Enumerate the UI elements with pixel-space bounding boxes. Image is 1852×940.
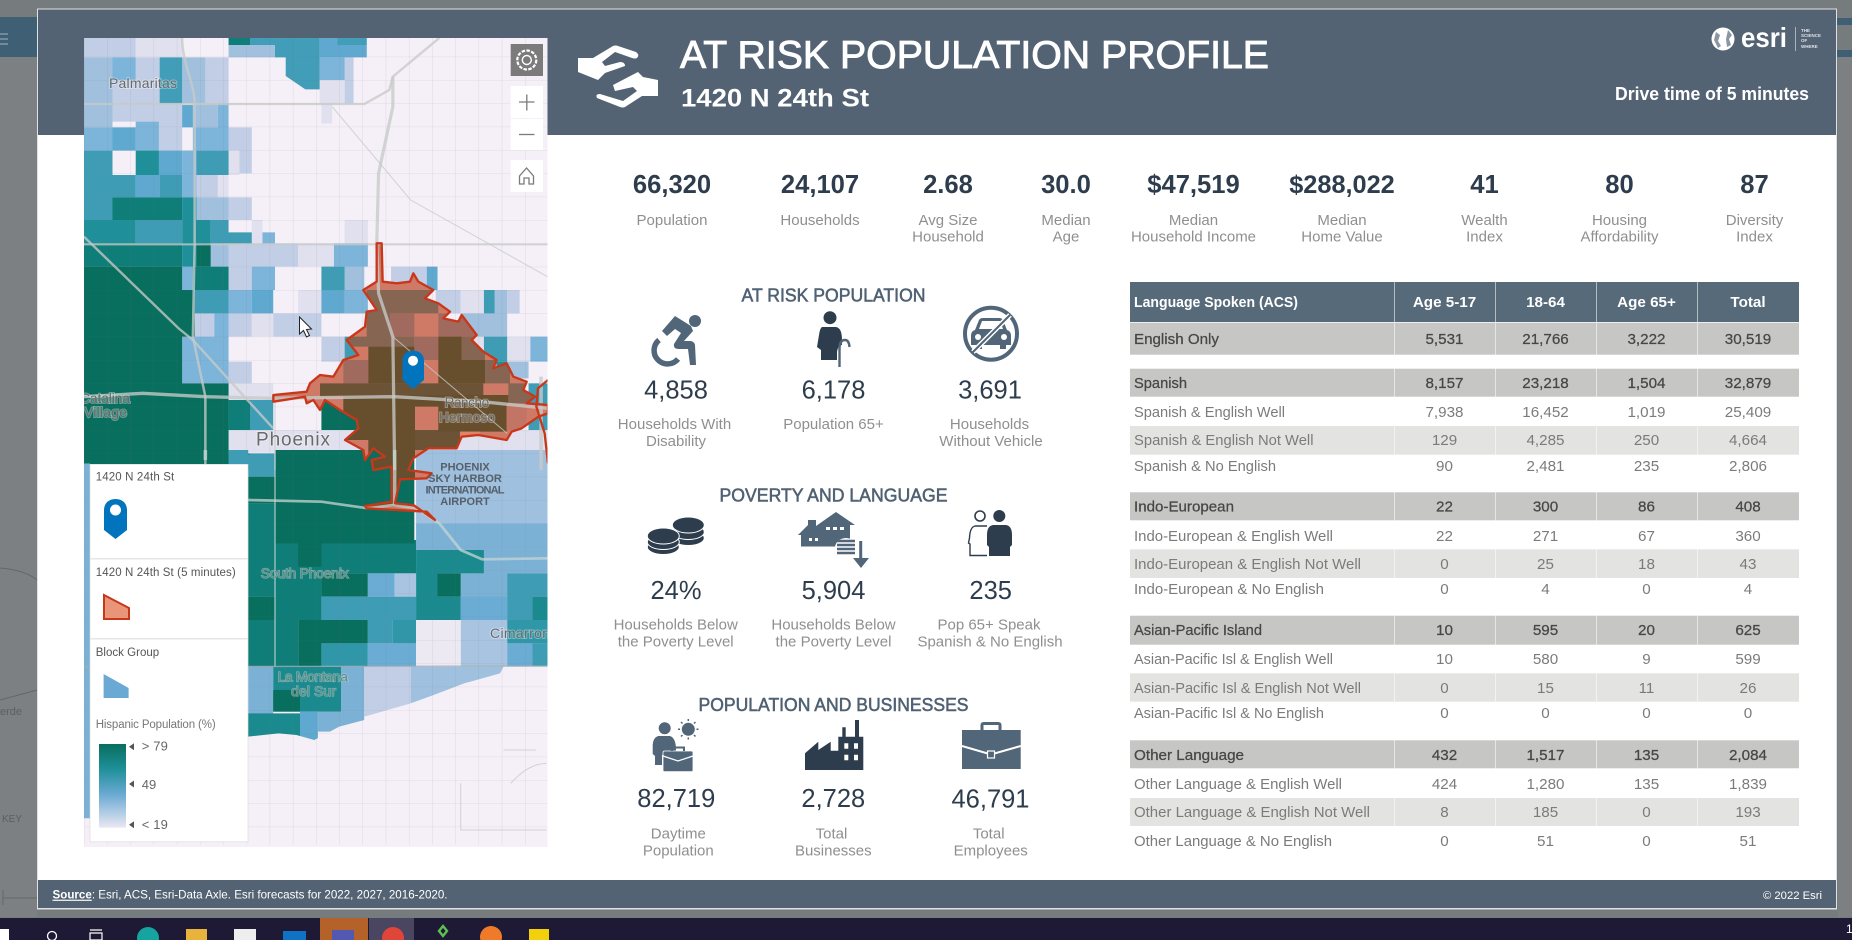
- stat: disability: Disability: [646, 433, 707, 450]
- row: Spanish: 32,879: [1725, 375, 1771, 392]
- row: Indo-European and English Well: 67: [1638, 528, 1655, 545]
- stat: daytime population: 82,719: [637, 785, 715, 813]
- row: Indo-European and No English: Indo-European & No English: [1134, 582, 1324, 598]
- stat: pct below poverty: the Poverty Level: [618, 633, 734, 650]
- place labels: La Montana: [278, 669, 348, 685]
- table header row: [1130, 282, 1799, 322]
- esri logo: WHERE: [1801, 44, 1818, 49]
- row: Indo-European and No English: 4: [1744, 581, 1752, 598]
- row: Spanish: Spanish: [1134, 376, 1187, 392]
- row: Asian-Pacific Island: [1134, 622, 1761, 639]
- stat: disability: [618, 376, 731, 450]
- icon: daytime population: [653, 719, 698, 772]
- row: English Only: 3,222: [1627, 331, 1666, 348]
- drive-time outline: [273, 243, 548, 520]
- stat: population 65+: 6,178: [802, 376, 865, 404]
- row: Other Language and No English: 51: [1537, 833, 1554, 850]
- stat: no vehicle: Without Vehicle: [939, 433, 1043, 450]
- stat: no vehicle: Households: [950, 416, 1029, 433]
- stat: pct below poverty: Households Below: [614, 616, 738, 633]
- stat: total employees: Total: [973, 825, 1005, 842]
- row: Spanish and No English: 235: [1634, 458, 1659, 475]
- legend: pin symbol: [104, 499, 127, 539]
- icon: coins: [647, 517, 704, 554]
- panel: key statistics: 24,107: [781, 171, 859, 199]
- panel: key statistics: Age: [1053, 228, 1079, 246]
- row: Spanish and English Well: 25,409: [1725, 404, 1771, 421]
- row: English Only: 30,519: [1725, 331, 1771, 348]
- row: Other Language: 135: [1634, 747, 1659, 764]
- row: English Only: 21,766: [1522, 331, 1569, 348]
- table header row: Age 65+: [1617, 294, 1676, 311]
- legend: colour ramp: [99, 739, 168, 832]
- row: Indo-European and English Well: 271: [1533, 528, 1558, 545]
- row: Asian-Pacific Island: 595: [1533, 622, 1558, 639]
- row: Other Language and English Well: 424: [1432, 776, 1457, 793]
- row: Asian-Pacific Island: 625: [1735, 622, 1761, 639]
- panel: at risk population: [618, 284, 1043, 450]
- place labels: Hermoso: [439, 410, 495, 425]
- icon: location pin: [402, 351, 424, 389]
- row: Indo-European and No English: 4: [1541, 581, 1550, 598]
- row: Other Language and No English: 0: [1440, 833, 1449, 850]
- icon: house with falling coins: [798, 512, 869, 568]
- panel: key statistics: Diversity: [1726, 212, 1784, 229]
- column dividers: [1394, 282, 1698, 855]
- place labels: INTERNATIONAL: [426, 485, 505, 497]
- row: Indo-European and English Not Well: [1134, 556, 1756, 573]
- stat: population 65+: Population 65+: [783, 416, 884, 433]
- row: English Only: English Only: [1134, 332, 1220, 348]
- row: Other Language: [1134, 747, 1767, 764]
- row: Other Language: 432: [1432, 747, 1457, 764]
- stat: total businesses: Businesses: [795, 842, 872, 859]
- row: Other Language and English Well: 1,839: [1729, 776, 1767, 793]
- panel: key statistics: 87: [1740, 171, 1769, 199]
- panel: key statistics: Median: [1317, 212, 1367, 229]
- stat: daytime population: Daytime: [651, 825, 706, 842]
- panel: key statistics: Housing: [1592, 212, 1647, 229]
- row: Asian-Pacific and No English: 0: [1744, 705, 1752, 722]
- legend: 1420 N 24th St: [96, 472, 175, 484]
- panel: key statistics: 2.68: [923, 171, 973, 199]
- row: Asian-Pacific Island: Asian-Pacific Island: [1134, 623, 1262, 639]
- row: Asian-Pacific and No English: 0: [1642, 705, 1651, 722]
- row: Indo-European and English Not Well: 0: [1440, 556, 1449, 573]
- row: Indo-European and English Not Well: 18: [1638, 556, 1655, 573]
- row: Other Language and English Well: Other Language & English Well: [1134, 777, 1342, 793]
- header bar: [38, 10, 1836, 135]
- row: Other Language: 1,517: [1526, 747, 1565, 764]
- panel: key statistics: 80: [1605, 171, 1634, 199]
- footer bar: [38, 880, 1836, 908]
- row: Spanish and No English: Spanish & No English: [1134, 459, 1276, 475]
- row: Indo-European and English Well: [1134, 528, 1761, 545]
- legend: Hispanic Population (%): [96, 719, 216, 731]
- panel: key statistics: [633, 171, 1784, 246]
- map widgets: [511, 44, 543, 192]
- stat: households below poverty: Households Below: [771, 616, 896, 633]
- legend: [90, 464, 248, 842]
- row: Spanish and English Not Well: 250: [1634, 432, 1659, 449]
- icon: mouse cursor: [300, 317, 312, 337]
- row: Indo-European and English Not Well: 25: [1537, 556, 1554, 573]
- row: Spanish: [1134, 375, 1771, 392]
- panel: key statistics: Wealth: [1461, 212, 1508, 229]
- row: Asian-Pacific and No English: [1134, 705, 1752, 722]
- stat: disability: Households With: [618, 416, 731, 433]
- row: Spanish and English Not Well: Spanish & English Not Well: [1134, 433, 1314, 449]
- table header row: Age 5-17: [1413, 294, 1476, 311]
- icon: helping hands: [578, 46, 658, 108]
- row: Other Language and English Not Well: Other Language & English Not Well: [1134, 805, 1370, 821]
- row: Asian-Pacific and English Well: 9: [1642, 651, 1651, 668]
- row: Other Language and English Not Well: 185: [1533, 804, 1558, 821]
- row: Other Language and No English: [1134, 833, 1756, 850]
- stat: total businesses: [795, 785, 872, 859]
- stat: disability: 4,858: [644, 376, 708, 404]
- panel: key statistics: 66,320: [633, 171, 711, 199]
- row: Indo-European: 408: [1735, 498, 1761, 515]
- row: English Only: 5,531: [1425, 331, 1464, 348]
- copyright: © 2022 Esri: [1763, 890, 1822, 902]
- row: Spanish and No English: 2,481: [1526, 458, 1565, 475]
- heading: AT RISK POPULATION: [742, 284, 926, 306]
- row: Spanish: 23,218: [1522, 375, 1569, 392]
- place labels: PHOENIX: [440, 462, 490, 474]
- row: Indo-European and English Not Well: Indo-European & English Not Well: [1134, 557, 1361, 573]
- row: English Only: [1134, 331, 1771, 348]
- stat: pct below poverty: 24%: [650, 577, 702, 605]
- row: Indo-European and No English: [1134, 581, 1752, 598]
- stat: population 65+: [783, 376, 884, 433]
- legend: Block Group: [96, 647, 159, 659]
- table header row: Total: [1730, 294, 1766, 311]
- row: Spanish and English Not Well: 4,664: [1729, 432, 1767, 449]
- row: Spanish and English Not Well: 4,285: [1526, 432, 1565, 449]
- panel: key statistics: Household: [912, 228, 984, 246]
- panel: population and businesses: [637, 694, 1030, 859]
- stat: spanish and no english: [917, 577, 1063, 650]
- row: Asian-Pacific and English Not Well: 0: [1440, 680, 1449, 697]
- row backgrounds: [1130, 323, 1799, 826]
- row: Indo-European: 300: [1533, 498, 1558, 515]
- stat: pct below poverty: [614, 577, 738, 650]
- row: Other Language: 2,084: [1729, 747, 1767, 764]
- row: Other Language and No English: 51: [1740, 833, 1756, 850]
- stat: households below poverty: 5,904: [802, 577, 865, 605]
- place labels: Phoenix: [256, 430, 330, 450]
- row: Spanish and English Well: Spanish & English Well: [1134, 405, 1285, 421]
- panel: key statistics: Households: [780, 212, 860, 229]
- row: Asian-Pacific and English Not Well: Asian-Pacific Isl & English Not Well: [1134, 681, 1361, 697]
- map grid lines: [84, 38, 547, 845]
- row: Asian-Pacific and English Not Well: [1134, 680, 1756, 697]
- row: Spanish: 8,157: [1425, 375, 1464, 392]
- place labels: Catalina: [80, 390, 130, 406]
- row: Asian-Pacific and English Well: 580: [1533, 651, 1558, 668]
- place labels: SKY HARBOR: [428, 473, 502, 485]
- panel: map: [80, 38, 553, 847]
- legend: colour ramp: 49: [142, 777, 156, 792]
- esri logo: SCIENCE: [1801, 33, 1821, 38]
- icon: briefcase: [962, 724, 1021, 769]
- row: Asian-Pacific and English Well: 599: [1735, 651, 1761, 668]
- stat: total employees: 46,791: [952, 786, 1030, 814]
- esri logo: esri: [1741, 22, 1787, 53]
- legend: colour ramp: > 79: [142, 739, 168, 754]
- stat: total employees: [952, 786, 1030, 859]
- row: Other Language and No English: 0: [1642, 833, 1651, 850]
- subtitle: address: 1420 N 24th St: [681, 84, 870, 112]
- row: Indo-European and English Well: 360: [1735, 528, 1761, 545]
- esri logo: THE: [1801, 28, 1810, 33]
- row: Asian-Pacific and English Well: [1134, 651, 1761, 668]
- row: Spanish and English Well: 1,019: [1627, 404, 1666, 421]
- row: Spanish and English Well: [1134, 404, 1771, 421]
- icon: wheelchair: [654, 315, 701, 365]
- place labels: Cimarron: [490, 625, 550, 641]
- row: Spanish and No English: [1134, 458, 1767, 475]
- stat: spanish and no english: Spanish & No English: [917, 633, 1063, 650]
- row: Indo-European and No English: 0: [1440, 581, 1449, 598]
- place labels: South Phoenix: [261, 565, 349, 581]
- row: Other Language and No English: Other Language & No English: [1134, 834, 1332, 850]
- row: Indo-European: 86: [1638, 498, 1655, 515]
- stat: households below poverty: [771, 577, 896, 650]
- row: Spanish: 1,504: [1627, 375, 1666, 392]
- row: Other Language: Other Language: [1134, 748, 1244, 764]
- panel: key statistics: Median: [1169, 212, 1218, 229]
- panel: key statistics: Household Income: [1131, 228, 1256, 246]
- panel: key statistics: $47,519: [1147, 171, 1240, 199]
- esri logo: OF: [1801, 38, 1808, 43]
- row: Other Language and English Well: 135: [1634, 776, 1659, 793]
- row: Asian-Pacific and English Not Well: 26: [1740, 680, 1756, 697]
- stat: total businesses: Total: [816, 825, 847, 842]
- taskbar: [0, 918, 1852, 940]
- table header row: 18-64: [1526, 294, 1565, 311]
- row: Spanish and No English: 90: [1436, 458, 1453, 475]
- row: Other Language and English Not Well: [1134, 804, 1761, 821]
- row: Other Language and English Not Well: 0: [1642, 804, 1651, 821]
- row: Asian-Pacific and English Not Well: 11: [1639, 680, 1654, 697]
- row: Asian-Pacific Island: 10: [1436, 622, 1453, 639]
- stat: daytime population: [637, 785, 715, 859]
- esri logo: [1712, 22, 1821, 53]
- row: Asian-Pacific and No English: Asian-Pacific Isl & No English: [1134, 706, 1324, 722]
- place labels: Palmaritas: [109, 75, 177, 91]
- row: Indo-European: 22: [1436, 498, 1453, 515]
- panel: key statistics: Home Value: [1301, 228, 1383, 246]
- place labels: [80, 75, 550, 699]
- row: Indo-European: Indo-European: [1134, 499, 1234, 515]
- heading: POPULATION AND BUSINESSES: [698, 694, 968, 715]
- row: Asian-Pacific and English Well: Asian-Pacific Isl & English Well: [1134, 652, 1333, 668]
- desktop background: erde: [0, 706, 22, 718]
- row: Spanish and English Not Well: 129: [1432, 432, 1457, 449]
- panel: key statistics: 41: [1470, 171, 1499, 199]
- row: Other Language and English Well: 1,280: [1526, 776, 1565, 793]
- heading: POVERTY AND LANGUAGE: [720, 485, 948, 506]
- stat: spanish and no english: Pop 65+ Speak: [937, 616, 1041, 633]
- row: Asian-Pacific and English Not Well: 15: [1537, 680, 1554, 697]
- legend: 1420 N 24th St (5 minutes): [96, 567, 236, 579]
- icon: no vehicle: [965, 308, 1017, 360]
- panel: key statistics: Affordability: [1580, 228, 1659, 246]
- row: Indo-European and No English: 0: [1642, 581, 1651, 598]
- stat: daytime population: Population: [643, 842, 714, 859]
- stat: no vehicle: [939, 376, 1043, 450]
- panel: poverty and language: [614, 485, 1063, 650]
- row: Indo-European: [1134, 498, 1761, 515]
- panel: key statistics: Index: [1736, 228, 1773, 246]
- row: Asian-Pacific Island: 20: [1638, 622, 1655, 639]
- row: Spanish and No English: 2,806: [1729, 458, 1767, 475]
- stat: spanish and no english: 235: [969, 577, 1012, 605]
- row: Indo-European and English Not Well: 43: [1740, 556, 1756, 573]
- row: Spanish and English Not Well: [1134, 432, 1767, 449]
- panel: key statistics: Population: [637, 212, 707, 229]
- stat: households below poverty: the Poverty Level: [776, 633, 891, 650]
- title: AT RISK POPULATION PROFILE: [680, 34, 1269, 77]
- row: Asian-Pacific and No English: 0: [1541, 705, 1550, 722]
- row: Other Language and English Not Well: 8: [1440, 804, 1449, 821]
- place labels: Rancho: [445, 395, 489, 410]
- stat: no vehicle: 3,691: [958, 376, 1022, 404]
- panel: key statistics: Median: [1041, 212, 1091, 229]
- row: Other Language and English Not Well: 193: [1735, 804, 1761, 821]
- row: Spanish and English Well: 16,452: [1522, 404, 1569, 421]
- source note: Source: Esri, ACS, Esri-Data Axle. Esri forecasts for 2022, 2027, 2016-2020.: [52, 889, 448, 902]
- roads: [84, 38, 547, 470]
- place labels: Village: [84, 404, 127, 420]
- drive-time area: [274, 244, 547, 513]
- legend: colour ramp: < 19: [142, 817, 168, 832]
- panel: key statistics: 30.0: [1041, 171, 1091, 199]
- row: Asian-Pacific and English Well: 10: [1436, 651, 1453, 668]
- stat: total employees: Employees: [954, 842, 1028, 859]
- row: Spanish and English Well: 7,938: [1425, 404, 1464, 421]
- row: Indo-European and English Well: 22: [1436, 528, 1453, 545]
- row: Other Language and English Well: [1134, 776, 1767, 793]
- panel: key statistics: Avg Size: [919, 212, 977, 229]
- legend: area symbol: [104, 595, 129, 619]
- place labels: AIRPORT: [440, 496, 490, 508]
- icon: factory: [805, 720, 863, 770]
- row: Indo-European and English Well: Indo-European & English Well: [1134, 529, 1333, 545]
- icon: elder with cane: [817, 311, 850, 367]
- row: Asian-Pacific and No English: 0: [1440, 705, 1449, 722]
- desktop background: KEY: [2, 814, 22, 825]
- table: language spoken: [1130, 282, 1799, 855]
- drive time note: Drive time of 5 minutes: [1615, 84, 1809, 104]
- icon: two people: [968, 510, 1012, 556]
- panel: key statistics: Index: [1466, 228, 1503, 246]
- legend: block group symbol: [104, 674, 129, 698]
- panel: key statistics: $288,022: [1289, 171, 1395, 199]
- stat: total businesses: 2,728: [801, 785, 865, 813]
- place labels: del Sur: [291, 683, 336, 699]
- table header row: Language Spoken (ACS): [1134, 295, 1298, 311]
